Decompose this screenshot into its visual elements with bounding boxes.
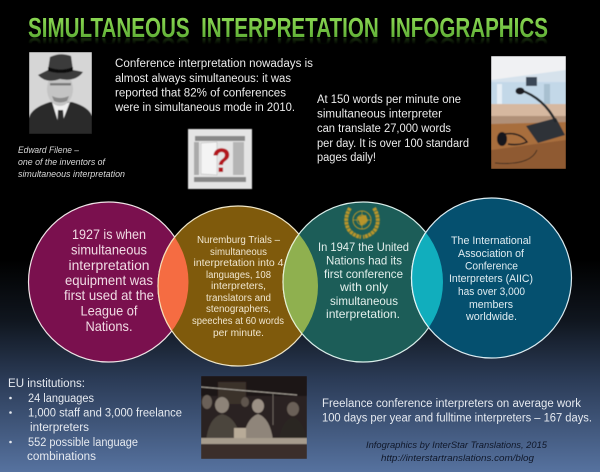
text: credits — [366, 440, 548, 464]
text: conference share: reported that 82% of conferences — [115, 88, 286, 100]
caption: Edward Filene: one of the inventors of — [18, 157, 106, 168]
text: working days: Freelance conference interpreters on average work — [322, 398, 581, 410]
text: credits: http://interstartranslations.com/blog — [381, 453, 535, 464]
text: AIIC: members — [469, 299, 513, 311]
text: conference share: were in simultaneous mode in 2010. — [114, 102, 295, 114]
text: Nuremburg Trials: interpretation into 4 — [194, 258, 284, 269]
text: Nuremburg Trials: stenographers, — [206, 304, 271, 315]
photo: Edward Filene portrait — [29, 52, 92, 134]
caption: Edward Filene — [18, 145, 125, 180]
text: Nuremburg Trials: Nuremburg Trials – — [197, 235, 280, 246]
text: words per day: simultaneous interpreter — [317, 108, 442, 120]
text: EU institutions: 24 languages — [28, 393, 94, 405]
text: 1927: 1927 is when — [72, 226, 146, 242]
text: United Nations: with only — [339, 280, 388, 294]
text: AIIC: Association of — [458, 248, 525, 260]
text: 1927: equipment was — [65, 272, 153, 288]
text: United Nations: first conference — [324, 267, 403, 281]
text: United Nations — [318, 240, 409, 321]
text: words per day: pages daily! — [317, 152, 376, 164]
text: AIIC: worldwide. — [465, 311, 517, 323]
title — [28, 12, 548, 63]
caption: Edward Filene: Edward Filene – — [18, 145, 80, 156]
text: 1927: interpretation — [68, 257, 150, 273]
text: EU institutions: EU institutions: — [8, 378, 85, 390]
overlap: teal — [410, 232, 443, 328]
text: AIIC: has over 3,000 — [458, 286, 525, 298]
text: 1927: simultaneous — [71, 242, 147, 258]
text: words per day: per day. It is over 100 standard — [317, 138, 469, 150]
text: working days: 100 days per year and fulltime interpreters – 167 days. — [322, 412, 592, 424]
text: Nuremburg Trials: per minute. — [213, 328, 264, 339]
text: Nuremburg Trials: translators and — [206, 293, 271, 304]
text: credits: Infographics by InterStar Translations, 2015 — [366, 440, 548, 451]
venn diagram — [28, 198, 572, 366]
text: conference share — [114, 58, 313, 114]
text: working days — [322, 398, 592, 424]
text: United Nations: simultaneous — [330, 294, 398, 308]
text: United Nations: Nations had its — [326, 254, 402, 268]
circle: AIIC — [412, 198, 572, 358]
text: EU institutions — [8, 378, 182, 463]
text: EU institutions: 552 possible language — [28, 437, 138, 449]
text: Nuremburg Trials: speeches at 60 words — [192, 316, 284, 327]
text: EU institutions: combinations — [27, 451, 96, 463]
text: AIIC: Interpreters (AIIC) — [449, 273, 533, 285]
text: 1927: Nations. — [86, 318, 132, 334]
photo: conference microphone — [491, 56, 566, 169]
circle: United Nations — [283, 202, 443, 362]
text: words per day: can translate 27,000 words — [317, 123, 451, 135]
text: 1927 — [64, 226, 154, 334]
icon: did you know — [188, 129, 252, 189]
text: 1927: League of — [80, 302, 138, 318]
text: conference share: almost always simultaneous: it was — [115, 73, 291, 85]
text: 1927: first used at the — [64, 287, 154, 303]
overlap: orange — [157, 236, 188, 331]
text: United Nations: interpretation. — [326, 307, 400, 321]
text: United Nations: In 1947 the United — [318, 240, 409, 254]
icon: did you know: ? — [212, 142, 231, 180]
overlap: green — [282, 234, 318, 334]
text: AIIC: The International — [451, 235, 531, 247]
caption: Edward Filene: simultaneous interpretation — [18, 169, 125, 180]
text: AIIC: Conference — [465, 260, 518, 272]
circle: 1927 League of Nations — [28, 202, 188, 362]
text: Nuremburg Trials — [192, 235, 284, 339]
text: words per day: At 150 words per minute one — [317, 94, 461, 106]
text: Nuremburg Trials: simultaneous — [210, 247, 267, 258]
text: AIIC — [449, 235, 533, 323]
text: EU institutions: 1,000 staff and 3,000 freelance — [28, 408, 182, 420]
text: conference share: Conference interpretation nowadays is — [115, 58, 313, 70]
text: Nuremburg Trials: interpreters, — [211, 281, 266, 292]
circle: Nuremburg Trials — [158, 206, 318, 366]
text: EU institutions: interpreters — [30, 422, 89, 434]
icon: UN emblem — [346, 208, 378, 237]
text: Nuremburg Trials: languages, 108 — [206, 270, 271, 281]
photo: Nuremberg interpreters — [201, 376, 307, 459]
text: words per day — [317, 94, 469, 164]
